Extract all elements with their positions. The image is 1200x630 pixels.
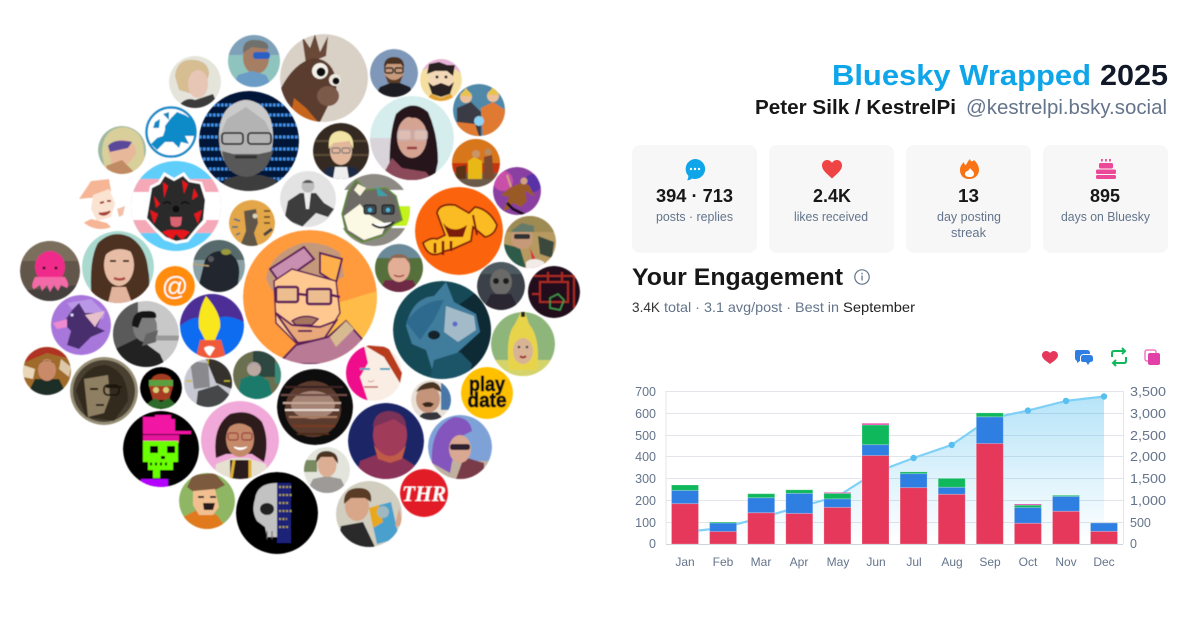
avatar: main orange cartoon portrait — [243, 230, 377, 364]
avatar: black and white man in profile — [113, 301, 179, 367]
month labels: May — [827, 555, 849, 569]
avatar: Playdate logo: date — [468, 390, 506, 412]
avatar: dark skull portrait — [477, 262, 525, 310]
avatar: at sign on orange — [155, 266, 195, 306]
left axis labels: 500 — [635, 429, 656, 443]
month labels — [675, 555, 1115, 569]
stat label: day posting — [937, 209, 1001, 224]
avatar: raccoon with glasses — [338, 174, 410, 246]
bar: Aug — [938, 478, 965, 544]
right axis labels: 0 — [1130, 537, 1137, 551]
avatar: Europe map — [145, 106, 197, 158]
avatar: dark bird — [193, 240, 245, 292]
avatar: red hair illustrated woman — [346, 345, 402, 401]
left axis labels: 100 — [635, 516, 656, 530]
left axis labels: 300 — [635, 472, 656, 486]
avatar: man with guitars — [23, 347, 71, 395]
display name: Peter Silk / KestrelPi — [755, 97, 956, 119]
avatar: orange fish creature — [415, 187, 503, 275]
left axis labels: 400 — [635, 450, 656, 464]
chart gridlines — [666, 391, 1124, 544]
left axis labels: 200 — [635, 494, 656, 508]
avatar: Playdate logo: play — [469, 374, 506, 396]
stat value: 2.4K — [813, 186, 851, 206]
month labels: Oct — [1019, 555, 1038, 569]
avatar: trans flag bear — [131, 161, 221, 251]
avatar: purple hair woman — [428, 415, 492, 479]
avatar: at sign on orange: @ — [162, 271, 188, 301]
right axis labels: 1,000 — [1130, 494, 1166, 508]
avatar: glitched face — [277, 369, 353, 445]
cumulative line — [685, 396, 1104, 532]
month labels: Dec — [1093, 555, 1115, 569]
bar: Feb — [710, 522, 737, 544]
bar: May — [824, 492, 851, 544]
avatar: green pixel skull — [123, 411, 199, 487]
legend icon: replies — [1075, 350, 1093, 365]
cumulative line points — [910, 393, 1107, 461]
stat label: likes received — [794, 209, 868, 224]
icon: info — [855, 270, 869, 284]
right axis labels: 2,000 — [1130, 450, 1166, 464]
icon: chat bubble — [686, 159, 705, 180]
avatar: half glitched skull — [236, 472, 318, 554]
avatar: anime ninjas — [453, 84, 505, 136]
avatar: woman with dark hair and glasses — [370, 96, 454, 180]
avatar: banana hood head — [491, 312, 555, 376]
right axis labels: 1,500 — [1130, 472, 1166, 486]
avatar: bearded cartoon — [420, 59, 462, 101]
icon: flame — [960, 159, 979, 179]
heading: your engagement: Your Engagement — [632, 264, 843, 291]
avatar: teal hoodie — [233, 351, 281, 399]
engagement summary: 3.4K — [632, 299, 661, 315]
right axis labels: 3,000 — [1130, 407, 1166, 421]
month labels: Mar — [751, 555, 771, 569]
left axis labels — [635, 385, 656, 551]
bar: Dec — [1090, 522, 1118, 544]
avatar: smiling woman on pink — [201, 401, 279, 479]
month labels: Sep — [979, 555, 1001, 569]
cumulative area — [685, 396, 1104, 544]
panel: day posting streak — [906, 145, 1031, 253]
avatar: blue and red duotone man — [348, 403, 424, 479]
avatar: blonde woman — [169, 56, 221, 108]
panel: days on Bluesky — [1043, 145, 1168, 253]
bar: Jan — [672, 485, 698, 544]
bar: Jul — [900, 472, 927, 544]
avatar: rocket — [180, 294, 244, 358]
avatar: THR logo — [400, 469, 448, 517]
avatar: man in grey sweater — [304, 447, 350, 493]
stat value: 13 — [958, 186, 979, 206]
avatar: Playdate logo — [461, 367, 513, 419]
avatar: purple dancer — [493, 167, 542, 215]
avatar: person in animal hat — [98, 126, 146, 174]
avatar: man with glasses and controller — [504, 216, 556, 268]
avatar: blue wolf — [393, 281, 491, 379]
bar: Apr — [786, 490, 813, 544]
avatar bubble cluster — [20, 34, 580, 554]
avatar: blond man with bookshelf — [313, 123, 369, 179]
avatar: bald man over code — [199, 91, 299, 191]
right axis labels — [1130, 385, 1166, 551]
title year: 2025 — [1100, 60, 1168, 92]
avatar: cartoon cowboy — [179, 473, 235, 529]
avatar: THR logo: THR — [402, 481, 446, 506]
chart legend — [1042, 348, 1160, 366]
month labels: Nov — [1055, 555, 1077, 569]
avatar: man in field — [375, 244, 423, 292]
title: Bluesky Wrapped — [832, 60, 1091, 92]
month labels: Apr — [790, 555, 808, 569]
left axis labels: 600 — [635, 407, 656, 421]
left axis labels: 0 — [649, 537, 656, 551]
avatar: old engraving portrait — [280, 171, 336, 227]
avatar: red neon circuit — [528, 266, 580, 318]
engagement summary: total · 3.1 avg/post · Best in — [664, 299, 839, 315]
avatar: man with glasses and dark shirt — [370, 49, 418, 97]
chart: monthly engagement — [635, 385, 1166, 569]
month labels: Aug — [941, 555, 963, 569]
avatar: man holding book — [336, 481, 403, 547]
avatar: dark monster — [140, 367, 182, 409]
right axis labels: 3,500 — [1130, 385, 1166, 399]
avatar: tic tic drawing — [229, 200, 275, 246]
stat label: posts · replies — [656, 209, 733, 224]
handle: @kestrelpi.bsky.social — [966, 97, 1167, 119]
bar: Sep — [976, 413, 1003, 544]
bar: Mar — [748, 494, 775, 544]
avatar: woman with long brown hair — [82, 231, 154, 303]
bar: Jun — [862, 423, 889, 544]
right axis labels: 2,500 — [1130, 429, 1166, 443]
avatar: pink octopus toy — [20, 241, 80, 301]
stat label line 2: streak — [951, 225, 986, 240]
month labels: Jul — [906, 555, 922, 569]
month labels: Jan — [675, 555, 695, 569]
icon: heart — [822, 160, 842, 178]
stacked bars — [672, 413, 1118, 544]
panel: posts and replies — [632, 145, 757, 253]
avatar: man in blue sunglasses — [228, 35, 280, 87]
stat value: 895 — [1090, 186, 1120, 206]
month labels: Jun — [866, 555, 886, 569]
right axis labels: 500 — [1130, 516, 1151, 530]
month labels: Feb — [713, 555, 734, 569]
avatar: red stage band — [452, 139, 500, 187]
avatar: sepia woman — [70, 357, 138, 425]
icon: cake — [1096, 159, 1116, 179]
stat label: days on Bluesky — [1061, 209, 1150, 224]
engagement summary — [632, 299, 915, 315]
legend icon: quotes — [1145, 350, 1160, 365]
avatar: orange line-art girl — [78, 178, 126, 230]
bar: Nov — [1052, 495, 1080, 544]
engagement summary: September — [843, 299, 915, 315]
avatar: grey woman target — [184, 359, 232, 407]
legend icon: likes — [1042, 351, 1058, 364]
panel: likes received — [769, 145, 894, 253]
avatar: man with moustache — [411, 380, 451, 420]
avatar: purple wolf — [51, 295, 111, 355]
left axis labels: 700 — [635, 385, 656, 399]
bar: Oct — [1014, 504, 1041, 544]
legend icon: reposts — [1112, 348, 1126, 366]
avatar: felt squirrel puppet — [280, 34, 368, 122]
stat value: 394 · 713 — [656, 186, 733, 206]
